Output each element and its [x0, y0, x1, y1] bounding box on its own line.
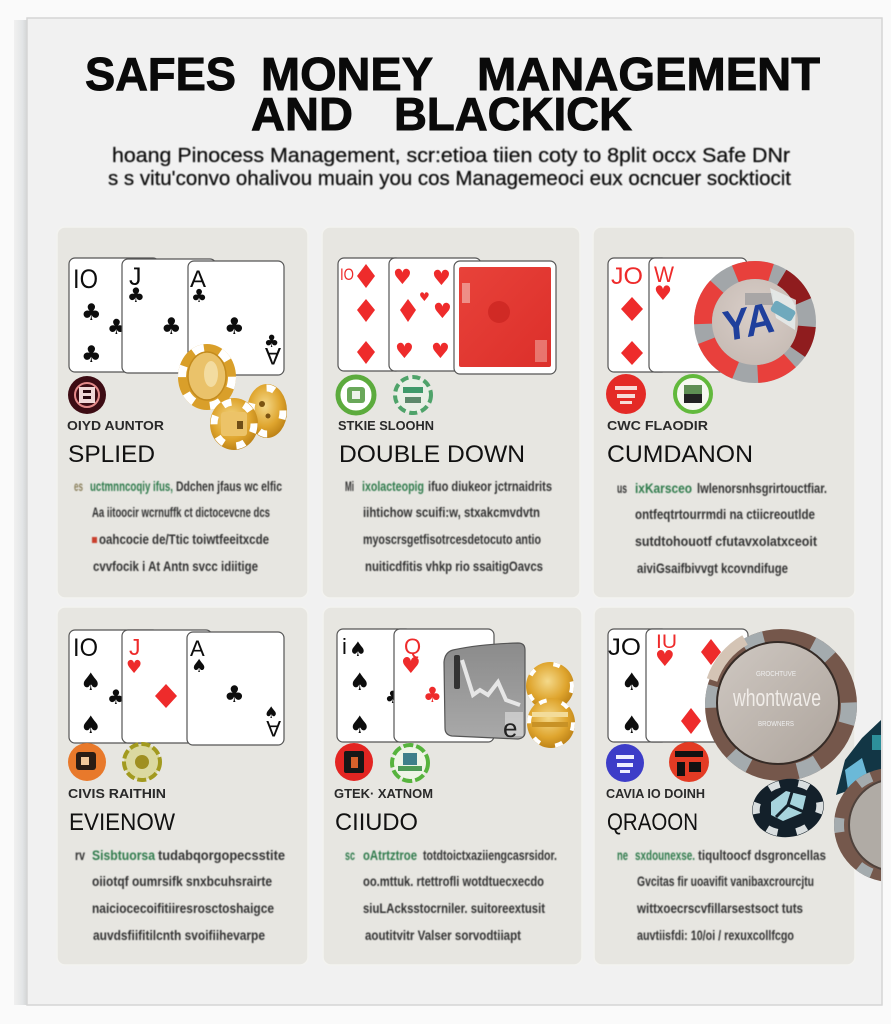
panel: qraoon [594, 607, 891, 965]
icon: large taupe chip: BROWNERS [758, 721, 794, 728]
playing cards: JO [608, 634, 641, 661]
body text: ifuo diukeor jctrnaidrits [428, 479, 552, 494]
playing cards [338, 258, 556, 374]
playing cards [608, 629, 748, 742]
body text: cvvfocik i At Antn svcc idiitige [93, 559, 258, 574]
playing cards: ♥ [655, 647, 675, 672]
playing cards: ♠ [621, 711, 643, 739]
playing cards: ♥ [432, 266, 451, 290]
label: CIVIS RAITHIN [68, 787, 166, 801]
body text: ixolacteopig [362, 479, 424, 494]
label: CWC FLAODIR [607, 419, 708, 433]
playing cards: ♥ [401, 654, 421, 679]
playing cards: Q [404, 634, 421, 659]
body text [345, 479, 552, 574]
playing cards: ♣ [81, 300, 102, 326]
playing cards: ♣ [81, 342, 102, 368]
playing cards: W [654, 262, 674, 287]
body text [75, 848, 285, 943]
body text [617, 481, 827, 576]
label: GTEK· XATNOM [334, 787, 433, 801]
icon: large taupe chip: whontwave [732, 685, 821, 712]
panel: evienow [57, 607, 308, 965]
body text: aoutitvitr Valser sorvodtiiapt [365, 928, 521, 943]
title: MANAGEMENT [477, 48, 820, 100]
body text: ontfeqtrtourrmdi na ctiicreoutlde [635, 507, 815, 522]
subtitle: hoang Pinocess Management, scr:etioa tiien coty to 8plit occx Safe DNr [112, 145, 790, 167]
icon: large taupe chip: GROCHTUVE [756, 671, 796, 678]
playing cards: ♥ [654, 281, 672, 305]
body text: naiciocecoifitiiresrosctoshaigce [92, 901, 274, 916]
playing cards: ♣ [224, 682, 245, 708]
playing cards: A [190, 266, 206, 293]
body text: Sisbtuorsa [92, 848, 155, 863]
icon: grey card [444, 643, 525, 743]
playing cards [337, 629, 494, 742]
playing cards: ♥ [126, 657, 142, 678]
playing cards: J [129, 263, 142, 291]
body text: wittxoecrscvfillarsestsoct tuts [636, 901, 803, 916]
heading: DOUBLE DOWN [339, 441, 525, 468]
playing cards: A [265, 342, 281, 369]
body text: sutdtohouotf cfutavxolatxceoit [635, 534, 817, 549]
playing cards [608, 258, 747, 372]
icon: red casino chip: YA [720, 293, 776, 351]
playing cards: A [266, 716, 281, 741]
playing cards: J [129, 634, 140, 660]
body text [617, 848, 826, 943]
heading: CIIUDO [335, 809, 418, 836]
body text: auvtiisfdi: 10/oi / rexuxcollfcgo [637, 928, 794, 943]
playing cards: A [190, 636, 205, 661]
icon: gold chips [178, 344, 287, 450]
playing cards: ♠ [191, 656, 207, 677]
icon: grey card: e [503, 713, 517, 743]
book spine [14, 20, 28, 1005]
playing cards: JO [611, 263, 643, 290]
icon: red casino chip [694, 261, 816, 383]
playing cards [69, 630, 284, 745]
playing cards: ♣ [161, 314, 182, 340]
icon: green emblem [338, 377, 374, 413]
title: AND [251, 88, 353, 140]
playing cards: ♣ [107, 315, 126, 339]
body text: sxdounexse. [635, 848, 695, 863]
icon: large taupe chip [689, 613, 873, 797]
playing cards: ♠ [621, 668, 643, 696]
body text [345, 848, 557, 943]
playing cards [69, 258, 284, 375]
body text: iihtichow scuifi:w, stxakcmvdvtn [363, 505, 540, 520]
icon: small black chip [748, 773, 828, 843]
playing cards: ♣ [191, 286, 207, 307]
playing cards: ♠ [264, 703, 278, 722]
playing cards: ♣ [224, 314, 245, 340]
body text: Ddchen jfaus wc elfic [176, 479, 282, 494]
icon: green emblem [675, 376, 711, 412]
body text: es [74, 479, 83, 494]
subtitle [108, 145, 791, 190]
body text [74, 479, 282, 574]
title: MONEY [261, 48, 433, 100]
icon: round emblem [68, 376, 106, 414]
title [85, 48, 820, 140]
title: SAFES [85, 48, 236, 100]
body text: Mi [345, 479, 354, 494]
playing cards: ♣ [107, 685, 125, 709]
body text: tudabqorgopecsstite [158, 848, 285, 863]
icon: black and red emblem [669, 742, 709, 782]
body text: auvdsfiifitilcnth svoifiihevarpe [93, 928, 265, 943]
heading: SPLIED [68, 441, 155, 468]
icon: cropped grey chip [834, 768, 881, 882]
body text: oAtrtztroe [363, 848, 417, 863]
icon: green emblem [392, 745, 428, 781]
body text: lwlenorsnhsgrirtouctfiar. [697, 481, 827, 496]
panel: cumdanon [593, 227, 855, 598]
label: STKIE SLOOHN [338, 419, 434, 433]
playing cards: IU [656, 632, 677, 653]
label: CAVIA IO DOINH [606, 787, 705, 801]
playing cards: ♠ [349, 711, 371, 739]
panel: double down [322, 227, 580, 598]
body text: totdtoictxaziiengcasrsidor. [423, 848, 557, 863]
icon: red emblem [606, 374, 646, 414]
body text: Aa iitoocir wcrnuffk ct dictocevcne dcs [92, 505, 270, 520]
body text: nuiticdfitis vhkp rio ssaitigOavcs [365, 559, 543, 574]
icon: orange emblem [68, 743, 106, 781]
body text: ne [617, 848, 628, 863]
body text: Gvcitas fir uoavifit vanibaxcrourcjtu [637, 874, 814, 889]
body text: us [617, 481, 627, 496]
playing cards: IO [73, 264, 98, 294]
body text: oo.mttuk. rtettrofli wotdtuecxecdo [363, 874, 544, 889]
icon: blue chip behind [836, 720, 881, 795]
playing cards: ♠ [80, 668, 102, 696]
playing cards: IO [340, 265, 354, 284]
heading: QRAOON [607, 809, 698, 836]
body text: rv [75, 848, 85, 863]
heading: EVIENOW [69, 809, 175, 836]
playing cards: ♣ [385, 688, 400, 708]
playing cards: ♥ [433, 299, 452, 323]
playing cards: ♥ [431, 339, 450, 363]
panel: ciiudo [323, 607, 582, 965]
playing cards: ♠ [349, 668, 371, 696]
playing cards: ♥ [393, 265, 412, 289]
body text: uctmnncoqiy ifus, [90, 479, 173, 494]
body text: myoscrsgetfisotrcesdetocuto antio [363, 532, 541, 547]
body text: siuLAcksstocrniler. suitoreextusit [363, 901, 545, 916]
body text: sc [345, 848, 355, 863]
playing cards: ♥ [419, 290, 430, 304]
icon: gold chips [526, 662, 575, 748]
title: BLACKICK [394, 88, 632, 140]
panel: splied [57, 227, 308, 598]
heading: CUMDANON [607, 441, 753, 468]
icon: blue emblem [606, 744, 644, 782]
playing cards: ♣ [264, 332, 279, 352]
body text: tiqultoocf dsgroncellas [698, 848, 826, 863]
playing cards: ♣ [423, 683, 442, 707]
body text: aiviGsaifbivvgt kcovndifuge [637, 561, 788, 576]
icon: striped emblem [395, 377, 431, 413]
playing cards: ♠ [80, 711, 102, 739]
icon: olive emblem [124, 744, 160, 780]
playing cards: i [342, 634, 347, 659]
playing cards: ♣ [127, 283, 145, 307]
playing cards: ♠ [349, 637, 367, 661]
body text: oahcocie de/Ttic toiwtfeeitxcde [99, 532, 269, 547]
playing cards: IO [73, 634, 98, 662]
icon: red emblem [335, 743, 373, 781]
playing cards: ♥ [395, 339, 414, 363]
body text: ixKarsceo [635, 481, 692, 496]
label: OIYD AUNTOR [67, 419, 164, 433]
body text: oiiotqf oumrsifk snxbcuhsrairte [92, 874, 272, 889]
subtitle: s s vitu'convo ohalivou muain you cos Managemeoci eux ocncuer socktiocit [108, 168, 791, 190]
